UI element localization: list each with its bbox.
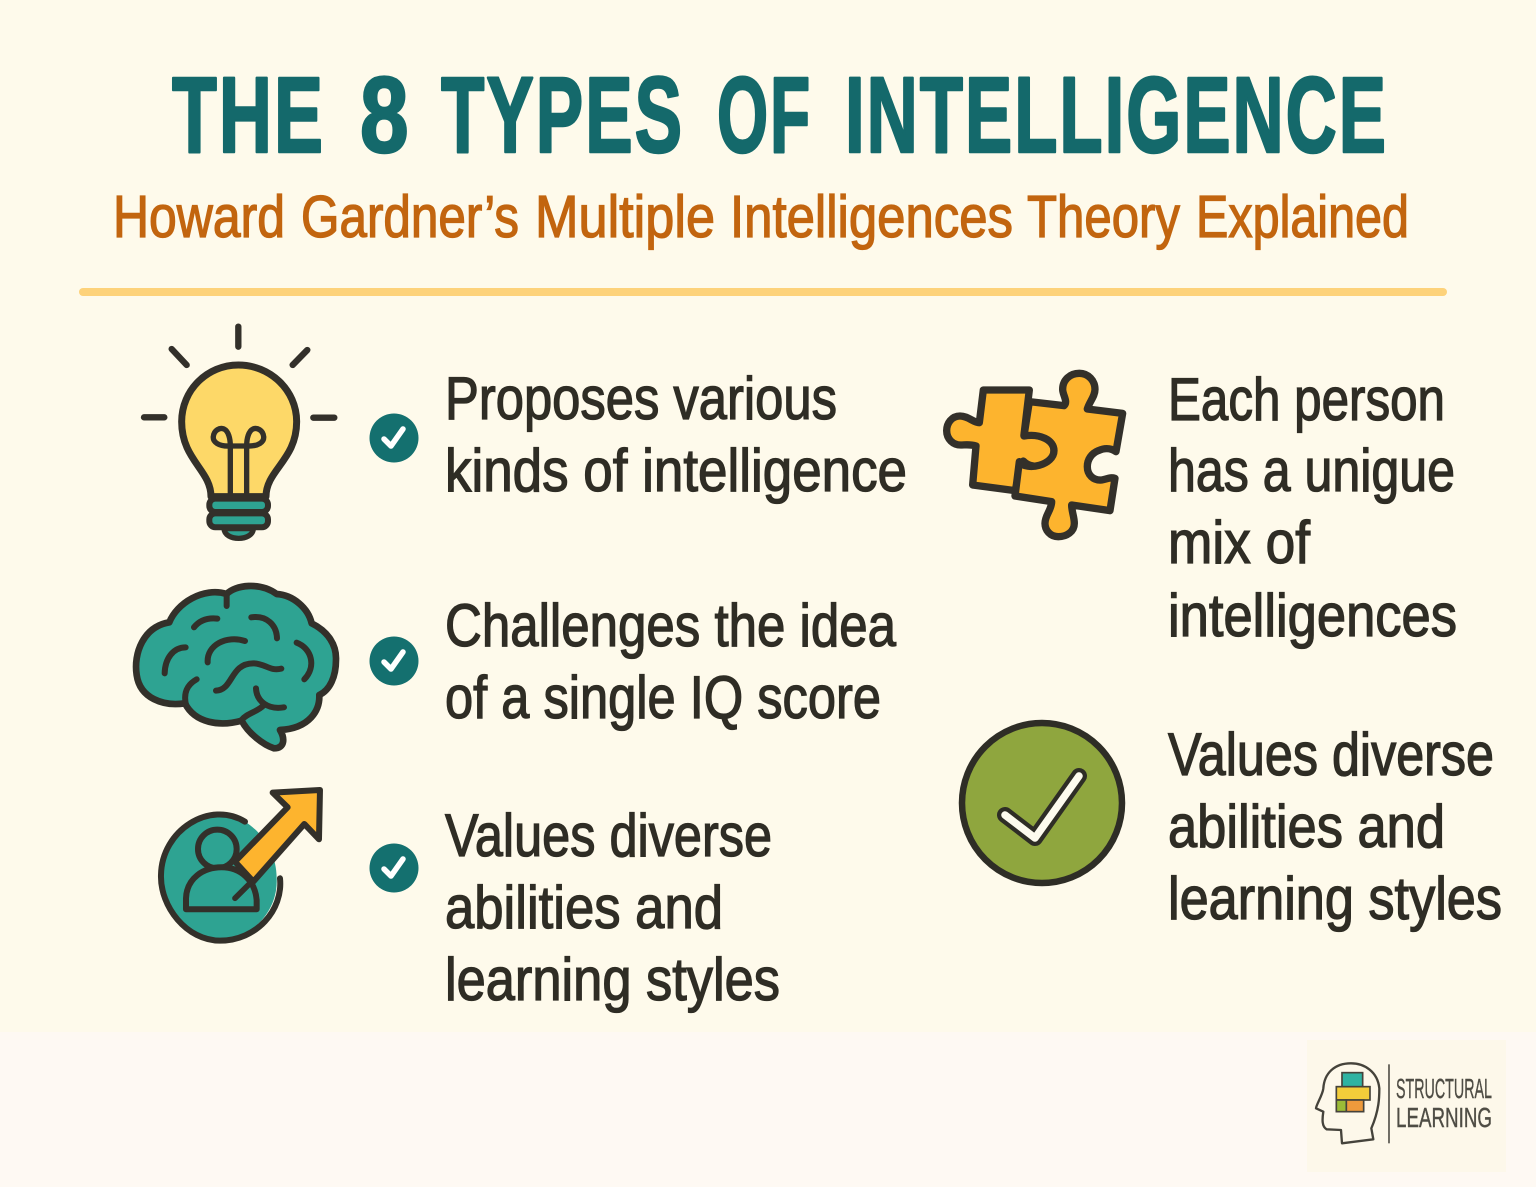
text: each person <box>1168 366 1457 649</box>
text: each person: intelligences <box>1168 582 1457 649</box>
text: challenges <box>445 592 897 731</box>
icon: light bulb <box>144 327 334 538</box>
icon: puzzle pieces <box>947 373 1123 537</box>
logo: structural learning <box>1307 1040 1506 1172</box>
title: THE <box>172 54 325 175</box>
title: OF <box>717 54 812 175</box>
icon: brain <box>136 586 336 748</box>
text: values right <box>1168 721 1502 932</box>
text: values left: abilities and <box>445 874 723 941</box>
text: proposes: kinds of intelligence <box>445 437 907 504</box>
text: each person: has a unigue <box>1168 437 1455 504</box>
subtitle: Gardner’s <box>301 184 519 250</box>
icon: person with arrow <box>161 790 320 941</box>
subtitle <box>113 184 1409 250</box>
subtitle: Howard <box>113 184 285 250</box>
icon: check badge 1 <box>370 414 418 462</box>
text: each person: mix of <box>1168 509 1310 576</box>
text: challenges: Challenges the idea <box>445 592 897 659</box>
subtitle: Explained <box>1196 184 1409 250</box>
icon: check badge 2 <box>370 636 418 686</box>
logo head icon <box>1316 1063 1389 1143</box>
subtitle: Multiple <box>535 184 715 250</box>
subtitle: Theory <box>1027 184 1180 250</box>
text: values right: abilities and <box>1168 793 1445 860</box>
logo wordmark: LEARNING <box>1396 1102 1492 1133</box>
text: proposes <box>445 365 907 504</box>
icon: check badge 3 <box>370 844 418 892</box>
text: values left: learning styles <box>445 946 780 1013</box>
title: 8 <box>360 54 411 175</box>
icon: large check circle <box>962 723 1122 883</box>
text: each person: Each person <box>1168 366 1445 433</box>
subtitle: Intelligences <box>730 184 1013 250</box>
logo wordmark <box>1396 1073 1492 1133</box>
text: values left <box>445 802 780 1013</box>
text: values left: Values diverse <box>445 802 772 869</box>
title <box>172 54 1388 175</box>
text: challenges: of a single IQ score <box>445 664 881 731</box>
text: proposes: Proposes various <box>445 365 837 432</box>
title: TYPES <box>441 54 684 175</box>
